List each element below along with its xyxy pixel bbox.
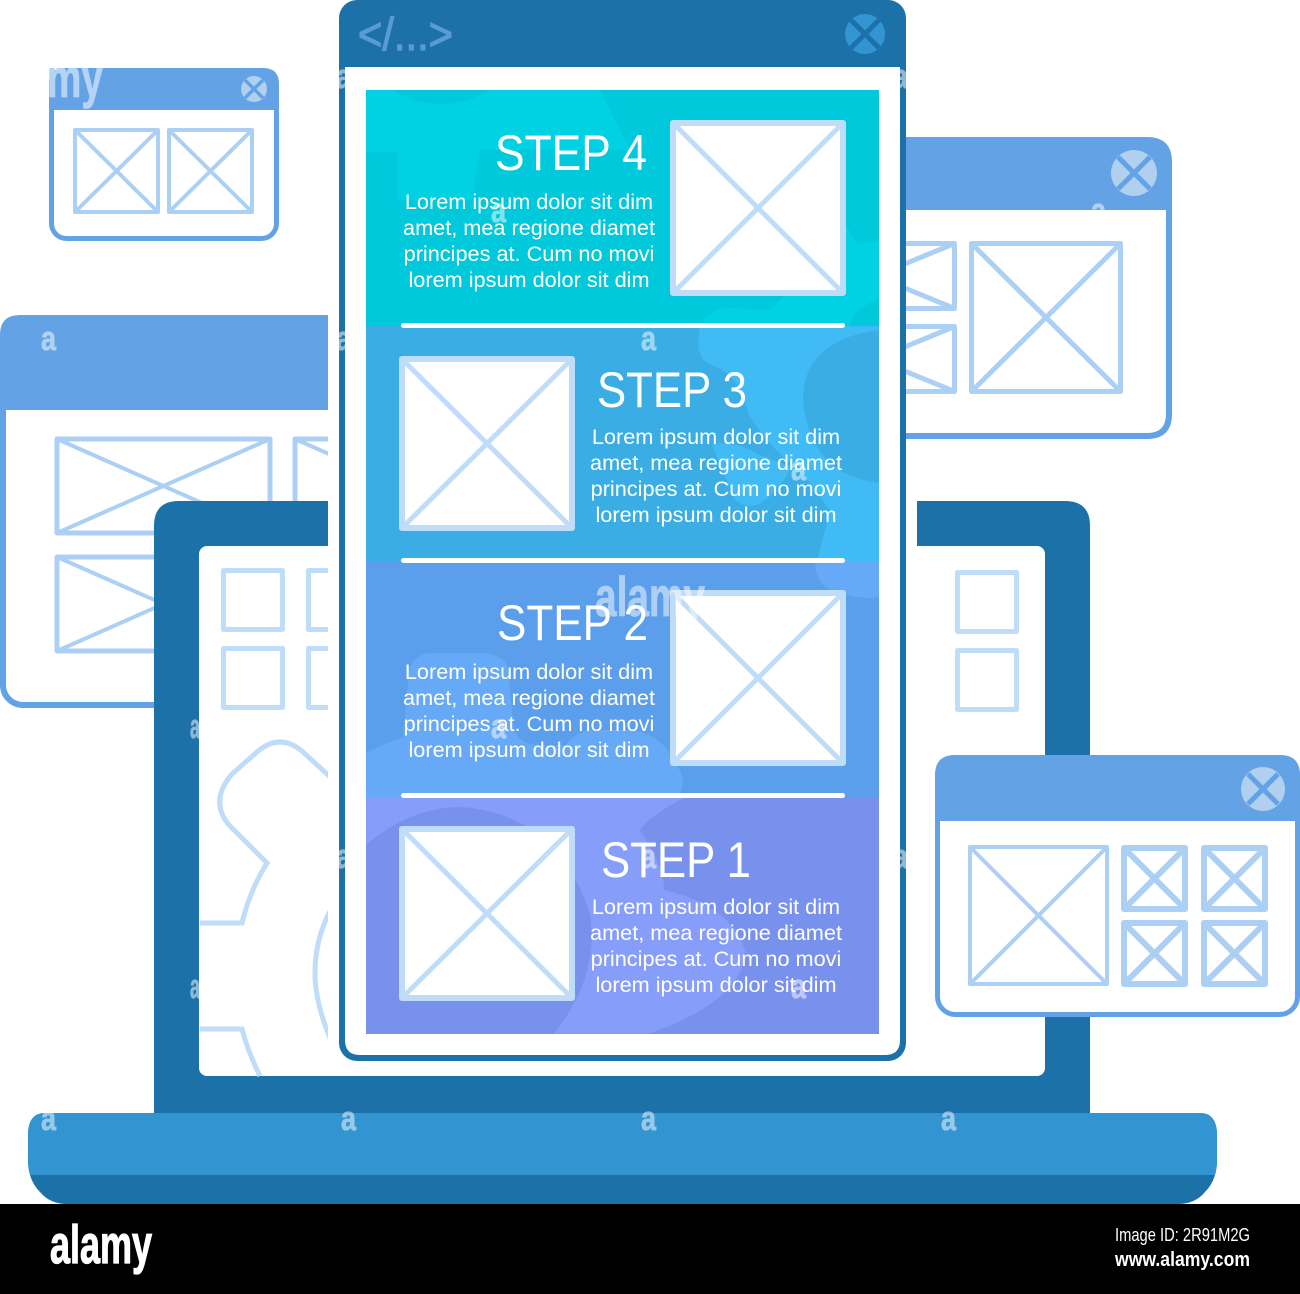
laptop: screen: [199, 546, 1045, 1076]
watermark marks: a: [941, 1100, 957, 1138]
watermark marks: a: [190, 968, 201, 1006]
footer bar: [0, 1204, 1300, 1294]
step 2 body text: amet, mea regione diamet: [403, 685, 655, 710]
panel: step 2: [366, 561, 879, 797]
watermark marks: a: [41, 1100, 57, 1138]
step 4 body text: amet, mea regione diamet: [403, 215, 655, 240]
step 1 body text: amet, mea regione diamet: [590, 920, 842, 945]
footer website: www.alamy.com: [1114, 1249, 1250, 1271]
panel: step 4: [366, 90, 879, 326]
watermark marks: a: [641, 838, 657, 876]
laptop: gear outline: [200, 742, 340, 1076]
watermark marks: a: [641, 320, 657, 358]
watermark marks: a: [641, 1100, 657, 1138]
watermark marks: a: [336, 58, 352, 96]
dividers: [401, 323, 845, 798]
step 3 title: STEP 3: [597, 362, 747, 418]
step 3 image placeholder: [402, 359, 572, 528]
watermark marks: a: [190, 708, 201, 746]
watermark marks: a: [491, 192, 507, 230]
step 3 body text: amet, mea regione diamet: [590, 450, 842, 475]
watermark marks: alamy: [595, 565, 705, 628]
step 2 image placeholder: [673, 593, 843, 763]
footer image id: Image ID: 2R91M2G: [1115, 1225, 1250, 1245]
step 3 body text: Lorem ipsum dolor sit dim: [592, 424, 840, 449]
step 4 body text: lorem ipsum dolor sit dim: [408, 267, 650, 292]
window: top left: [49, 68, 279, 241]
step 2 body text: Lorem ipsum dolor sit dim: [405, 659, 653, 684]
step 1 title: STEP 1: [601, 832, 751, 888]
panel: step 3: [366, 326, 879, 570]
white halo around phone: [328, 0, 917, 1076]
watermark marks: a: [341, 1100, 357, 1138]
phone: inner screen: [345, 67, 900, 1055]
footer logo: alamy: [50, 1215, 152, 1275]
watermark marks: a: [791, 968, 807, 1006]
watermark marks: a: [41, 320, 57, 358]
step 1 body text: principes at. Cum no movi: [591, 946, 841, 971]
panel: step 1: [366, 797, 879, 1034]
step 3 body text: principes at. Cum no movi: [591, 476, 841, 501]
window: right: a: [1091, 192, 1107, 230]
laptop: screen frame: [154, 501, 1090, 1121]
watermark marks: a: [893, 838, 909, 876]
watermark marks: a: [491, 708, 507, 746]
step 4 image placeholder: [673, 123, 843, 293]
watermark marks: a: [336, 320, 352, 358]
watermark marks: [41, 58, 957, 1138]
window: bottom right: [935, 755, 1300, 1014]
laptop: [28, 501, 1217, 1204]
watermark marks: a: [893, 58, 909, 96]
step 4 title: STEP 4: [495, 125, 647, 181]
phone: [339, 0, 906, 1061]
step 4 body text: Lorem ipsum dolor sit dim: [405, 189, 653, 214]
step 4 body text: principes at. Cum no movi: [404, 241, 654, 266]
laptop: base: [28, 1113, 1217, 1204]
step 2 title: STEP 2: [497, 595, 648, 651]
phone: body: [339, 0, 906, 1061]
phone: code icon: </...>: [358, 8, 453, 60]
step 3 body text: lorem ipsum dolor sit dim: [595, 502, 837, 527]
watermark marks: a: [791, 450, 807, 488]
step 1 image placeholder: [402, 829, 572, 998]
step 1 body text: lorem ipsum dolor sit dim: [595, 972, 837, 997]
laptop: wireframe squares: [224, 570, 1016, 710]
step 1 body text: Lorem ipsum dolor sit dim: [592, 894, 840, 919]
window: right: [906, 137, 1172, 439]
phone: close button: [845, 14, 885, 54]
watermark marks: a: [336, 838, 352, 876]
step 2 body text: lorem ipsum dolor sit dim: [408, 737, 650, 762]
step 2 body text: principes at. Cum no movi: [404, 711, 654, 736]
window: left large: [0, 315, 328, 708]
